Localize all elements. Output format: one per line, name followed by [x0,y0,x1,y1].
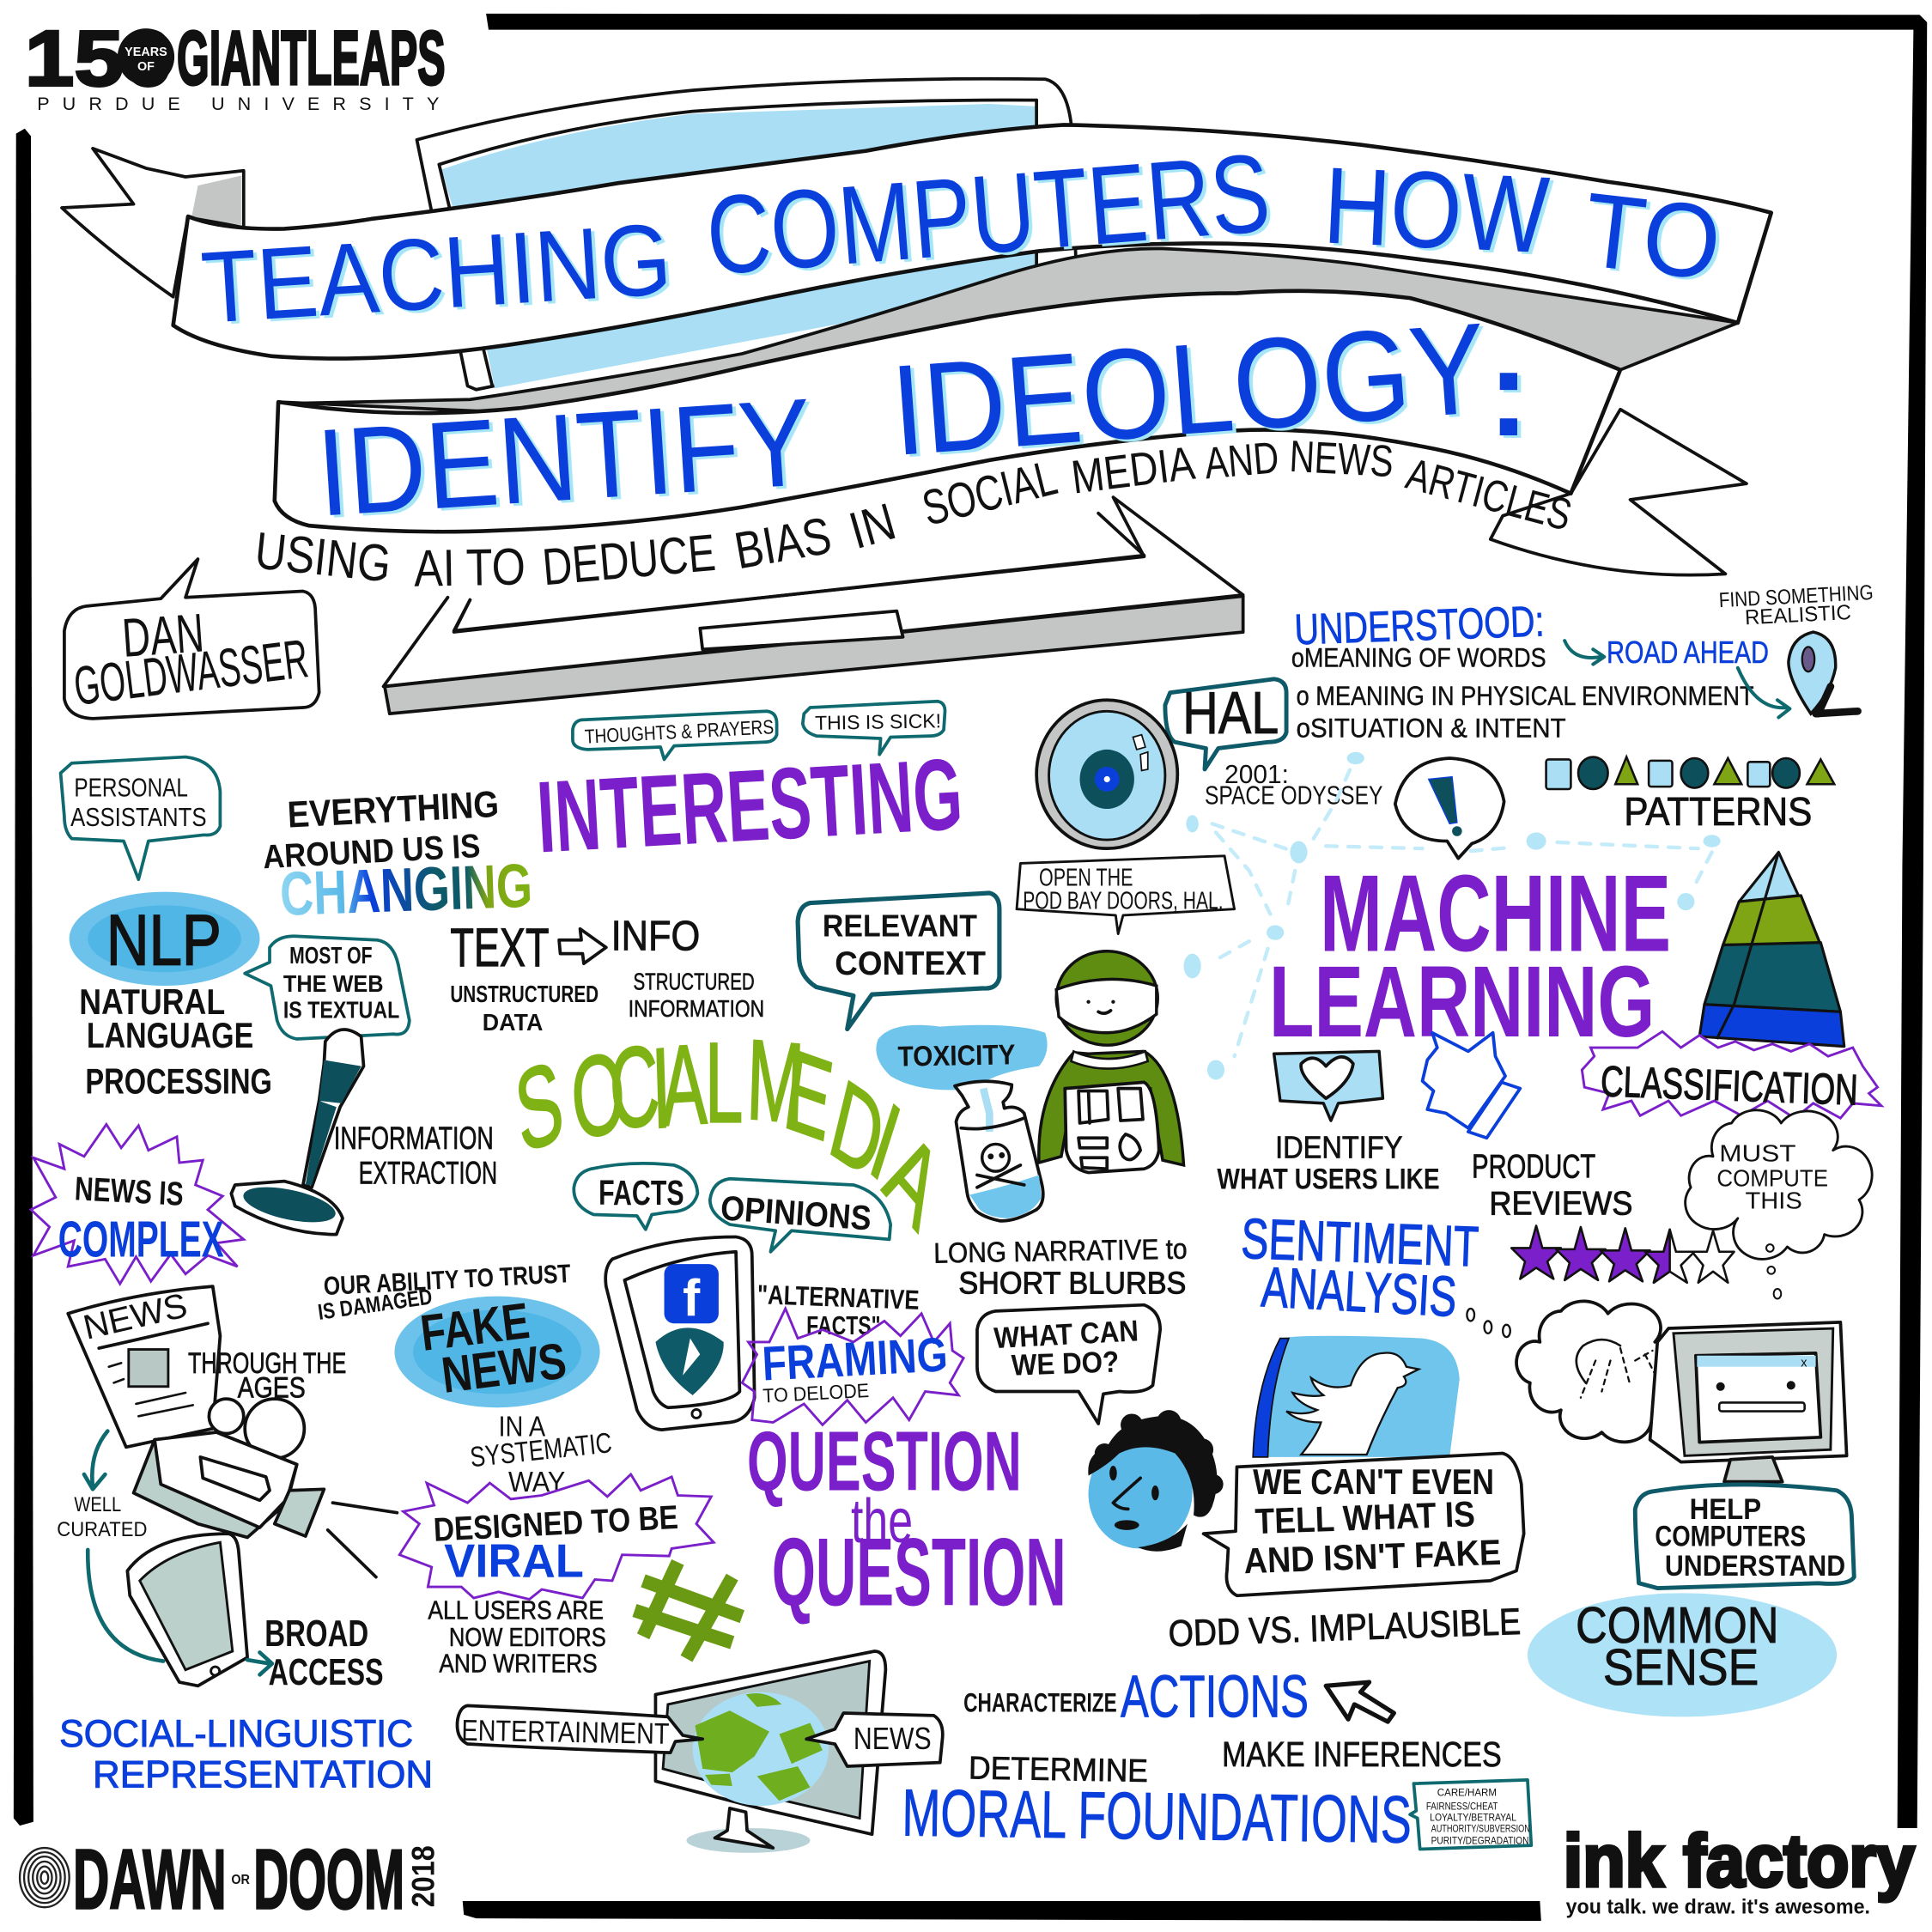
toxicity blob [876,1025,1048,1090]
burst: framing to decode [742,1309,963,1425]
speech bubble: what can we do: WHAT CAN [993,1315,1139,1355]
box: moral foundations list: LOYALTY/BETRAYAL [1430,1813,1517,1823]
text: in a systematic way: WAY [508,1467,565,1498]
common sense blob [1528,1593,1837,1716]
subtitle arc: NEWS [1288,431,1394,486]
icon: star rating [1511,1225,1735,1283]
burst: framing to decode: FRAMING [761,1327,949,1391]
text: unstructured data / structured information: STRUCTURED [634,968,755,994]
icon: newspaper: NEWS [80,1285,191,1347]
text: identify what users like: IDENTIFY [1275,1129,1402,1164]
text block: understood: o MEANING IN PHYSICAL ENVIRONMENT [1297,680,1754,711]
text: 2001 space odyssey: 2001: [1224,761,1289,789]
heading: sentiment analysis: SENTIMENT [1240,1207,1479,1279]
thought cloud: must compute this: COMPUTE [1716,1164,1828,1191]
text: determine / make inferences [969,1735,1502,1789]
speech bubble: help computers understand [1635,1485,1854,1589]
subtitle arc: ARTICLES [1401,448,1577,540]
logo: 150 years of giant leaps: PURDUE UNIVERSITY [37,93,439,114]
icon: hashtag [635,1562,742,1659]
icon: confused computer: x [1801,1357,1807,1370]
title line 2: identify ideology: IDEOLOGY [887,295,1491,483]
heading: machine learning: MACHINE [1320,853,1671,975]
subtitle arc: AI TO [414,538,526,598]
heading: question the question: QUESTION [747,1414,1022,1509]
thought cloud: must compute this [1686,1110,1872,1298]
icon: highlighter pen [231,1030,363,1235]
title ribbon tails [62,149,1747,575]
text: in a systematic way: IN A [499,1411,546,1443]
text: through the ages [188,1347,346,1405]
icon: smartphone with facebook logos: f [683,1269,701,1327]
text: unstructured data / structured information: DATA [483,1009,544,1036]
ink factory logo: you talk. we draw. it's awesome. [1566,1895,1870,1918]
burst: news is complex: NEWS IS [74,1170,185,1213]
text: our ability to trust is damaged: IS DAMAGED [317,1285,434,1325]
text: information extraction [334,1120,497,1191]
text: product reviews [1472,1148,1632,1223]
speech bubble: personal assistants [61,757,220,879]
burst: news is complex [31,1124,244,1284]
text: determine / make inferences: MAKE INFERENCES [1222,1735,1502,1774]
text: in a systematic way [469,1411,613,1498]
text: everything around us is changing [262,784,533,929]
text: broad access: BROAD [264,1613,368,1655]
icon: newspaper [68,1285,220,1447]
dawn or doom logo: DOOM [253,1832,404,1927]
text: identify what users like: WHAT USERS LIKE [1217,1163,1440,1195]
heading: machine learning: LEARNING [1269,945,1655,1059]
icon: confused computer [1650,1322,1847,1482]
title line 1: teaching computers how to: COMPUTERS [702,131,1274,299]
title ribbon 1 [173,125,1771,359]
icon: twitter card [1253,1336,1460,1457]
icon: HAL eye [1036,700,1177,848]
title line 2: identify ideology: : [1488,324,1529,462]
text: broad access: ACCESS [269,1652,384,1693]
constellation network [1184,752,1721,1080]
text: natural language processing [79,981,272,1101]
heading: sentiment analysis: ANALYSIS [1260,1255,1458,1329]
text: alternative facts: FACTS" [806,1312,881,1340]
speech bubble: relevant context: RELEVANT [823,908,977,943]
text: in a systematic way: SYSTEMATIC [469,1427,613,1473]
text: long narrative to short blurbs: LONG NARRATIVE to [933,1234,1188,1270]
text: find something realistic [1718,581,1874,629]
dawn or doom logo: DAWN [73,1832,227,1927]
text: alternative facts [756,1279,920,1340]
laptop illustration [384,79,1243,714]
dawn or doom logo: OR [231,1873,250,1887]
text: natural language processing: PROCESSING [85,1060,272,1101]
heading: question the question: the [851,1487,913,1556]
icons: pattern shapes row [1546,757,1834,789]
text: information extraction: INFORMATION [334,1120,494,1156]
speech bubble: most of the web is textual: IS TEXTUAL [283,996,399,1023]
speech bubble: opinions [710,1179,890,1252]
speech bubble: we can't even tell: TELL WHAT IS [1255,1493,1476,1541]
speech bubble: help computers understand: HELP [1690,1493,1761,1526]
icon: smartphone with facebook logos [605,1236,755,1430]
subtitle arc: DEDUCE [540,523,718,596]
fake news blob [395,1292,600,1407]
text: all users are now editors and writers: AND WRITERS [439,1650,598,1679]
text: product reviews: PRODUCT [1472,1148,1595,1185]
text: everything around us is changing: EVERYTHING [287,784,500,836]
burst: designed to be viral: DESIGNED TO BE [433,1499,679,1549]
box: moral foundations list [1410,1780,1531,1849]
text: broad access [264,1613,384,1693]
icon: television with globe [655,1651,885,1853]
text: well curated: CURATED [57,1518,147,1541]
icon: thought cloud with lightbulb [1516,1301,1693,1442]
text: all users are now editors and writers: ALL USERS ARE [428,1597,604,1625]
logo: 150 years of giant leaps: OF [137,60,155,74]
fake news blob: FAKE [417,1292,532,1362]
speech bubble: help computers understand: UNDERSTAND [1665,1550,1845,1583]
text to info arrow [450,913,700,978]
icon: poison bottle [955,1081,1043,1221]
toxicity blob: TOXICITY [897,1039,1016,1073]
ink factory logo: ink factory [1564,1820,1915,1903]
speech bubble: personal assistants: ASSISTANTS [70,804,207,832]
text: alternative facts: "ALTERNATIVE [756,1279,920,1315]
text: patterns: PATTERNS [1624,789,1812,834]
box: moral foundations list: CARE/HARM [1437,1789,1497,1799]
icon: astronaut [1039,951,1184,1173]
heading: social-linguistic representation: REPRESENTATION [93,1753,433,1795]
text block: understood: UNDERSTOOD: [1294,596,1545,653]
subtitle arc: MEDIA [1068,436,1198,504]
text: characterize actions: ACTIONS [1121,1662,1309,1729]
road ahead with arrows: ROAD AHEAD [1607,635,1769,670]
speech bubble: thoughts and prayers [573,711,777,759]
speech bubble: help computers understand: COMPUTERS [1655,1521,1806,1553]
title line 1: teaching computers how to [198,131,1727,345]
subtitle arc: SOCIAL [917,450,1062,537]
text: long narrative to short blurbs [933,1234,1188,1301]
text: well curated [57,1493,147,1541]
title line 1: teaching computers how to: TEACHING [198,203,675,345]
speech bubble: what can we do [977,1305,1160,1424]
heading: sentiment analysis [1240,1207,1510,1337]
text block: understood: oMEANING OF WORDS [1291,641,1546,672]
thought cloud: must compute this: THIS [1745,1187,1802,1213]
speech bubble: facts: FACTS [598,1173,684,1212]
text block: understood: oSITUATION & INTENT [1297,713,1566,744]
speech bubble: most of the web is textual: THE WEB [283,970,384,997]
text: long narrative to short blurbs: SHORT BLURBS [958,1266,1186,1301]
speech bubble: relevant context: CONTEXT [835,945,986,982]
icon: map pin [1789,632,1858,714]
speech bubble: personal assistants: PERSONAL [74,775,188,803]
speaker bubble: Dan Goldwasser: GOLDWASSER [70,629,312,717]
speech bubble: most of the web is textual: MOST OF [289,942,373,969]
NLP blob: NLP [106,900,222,981]
icon: worried person [1081,1410,1224,1555]
text: unstructured data / structured information: INFORMATION [629,995,764,1022]
heading: question the question: QUESTION [772,1518,1066,1626]
text: all users are now editors and writers [428,1597,606,1679]
text: through the ages: THROUGH THE [188,1347,346,1380]
logo: 150 years of giant leaps [25,14,446,114]
text: 2001 space odyssey [1205,761,1382,810]
title line 2: identify ideology: IDENTIFY [313,373,816,543]
text to info arrow: TEXT [450,918,550,978]
text: characterize actions [963,1662,1309,1729]
text to info arrow: INFO [611,913,700,959]
icon: film camera [134,1399,397,1577]
text: natural language processing: NATURAL [79,981,225,1022]
box: moral foundations list: PURITY/DEGRADATION [1431,1837,1528,1847]
text: unstructured data / structured information [450,968,764,1036]
icon: pyramid [1699,852,1844,1047]
text: 2001 space odyssey: SPACE ODYSSEY [1205,781,1382,810]
text: odd vs implausible: ODD VS. IMPLAUSIBLE [1168,1601,1522,1655]
text: characterize actions: CHARACTERIZE [963,1687,1117,1718]
logo: 150 years of giant leaps: GIANTLEAPS [177,15,446,100]
subtitle arc: USING [252,520,394,593]
speech bubble: HAL [1165,679,1286,769]
subtitle arc [252,431,1577,598]
text: everything around us is changing: AROUND US IS [262,828,481,876]
icon: tablet phone [127,1534,247,1686]
text: all users are now editors and writers: NOW EDITORS [449,1624,606,1652]
heading: moral foundations: MORAL FOUNDATIONS [902,1777,1412,1857]
box: moral foundations list: FAIRNESS/CHEAT [1426,1801,1498,1812]
speech bubble: relevant context [798,893,999,1029]
dawn or doom logo [20,1832,441,1927]
speech bubble: news [806,1713,943,1766]
title ribbon 2 [275,291,1620,532]
text: find something realistic: REALISTIC [1744,601,1852,629]
speech bubble: open the pod bay doors: OPEN THE [1039,864,1133,891]
speech bubble: we can't even tell: AND ISN'T FAKE [1243,1532,1502,1581]
icon: thumbs up [1423,1033,1520,1138]
heading: social-linguistic representation: SOCIAL-LINGUISTIC [59,1713,413,1755]
icon: heart chat bubble [1274,1051,1382,1121]
heading: social-linguistic representation [59,1713,433,1795]
speech bubble: thoughts and prayers: THOUGHTS & PRAYERS [584,715,775,748]
speech bubble: most of the web is textual [245,936,410,1039]
subtitle arc: BIAS [730,506,835,580]
logo: 150 years of giant leaps: 150 [25,14,173,102]
heading: machine learning [1269,853,1671,1059]
common sense blob: SENSE [1603,1639,1759,1696]
NLP blob [70,892,259,986]
text: information extraction: EXTRACTION [359,1155,497,1191]
burst: designed to be viral [399,1474,714,1600]
burst: designed to be viral: VIRAL [444,1534,584,1588]
arrow: news to well curated [84,1431,107,1489]
speech bubble: this is sick: THIS IS SICK! [815,709,941,734]
icon: cursor arrow [1326,1682,1394,1722]
text: identify what users like [1217,1129,1440,1195]
text: everything around us is changing: CHANGING [279,852,533,929]
speech bubble: open the pod bay doors [1017,856,1235,934]
grey ribbon fold [278,248,1738,412]
heading: question the question [747,1414,1066,1626]
speaker bubble: Dan Goldwasser: DAN [120,603,206,669]
text: natural language processing: LANGUAGE [87,1015,253,1055]
road ahead with arrows [1564,635,1789,717]
speech bubble: open the pod bay doors: POD BAY DOORS, HAL. [1023,888,1224,915]
box: moral foundations list: AUTHORITY/SUBVERSION [1431,1824,1530,1834]
text: find something realistic: FIND SOMETHING [1718,581,1874,612]
arrow: curated to phone [88,1550,163,1662]
speaker bubble: Dan Goldwasser [64,559,319,719]
subtitle arc: IN [843,491,902,560]
speech bubble: news: NEWS [854,1721,932,1756]
heading: social media arc: SOCIAL MEDIA [509,1016,953,1254]
text: well curated: WELL [74,1493,121,1516]
arrow: phone to broad access [247,1652,272,1674]
speech bubble: this is sick [803,702,945,755]
text: our ability to trust is damaged: OUR ABILITY TO TRUST [323,1260,572,1301]
speech bubble: entertainment: ENTERTAINMENT [461,1715,670,1751]
speech bubble: exclamation [1395,758,1504,859]
logo: 150 years of giant leaps: YEARS [125,46,167,59]
burst: framing to decode: TO DELODE [762,1379,870,1406]
text: product reviews: REVIEWS [1489,1186,1632,1223]
speech bubble: facts [574,1163,697,1230]
dawn or doom logo: 2018 [405,1845,441,1907]
text: determine / make inferences: DETERMINE [969,1749,1148,1789]
heading: interesting: INTERESTING [534,738,965,874]
title line 1: teaching computers how to: TO [1578,170,1727,302]
text block: understood [1291,596,1754,744]
burst: classification [1582,1031,1881,1118]
speech bubble: opinions: OPINIONS [720,1188,872,1238]
speech bubble: we can't even tell: WE CAN'T EVEN [1253,1461,1494,1502]
common sense blob: COMMON [1576,1597,1778,1654]
text: unstructured data / structured information: UNSTRUCTURED [450,981,598,1007]
subtitle arc: AND [1202,432,1281,488]
speech bubble: what can we do: WE DO? [1011,1346,1120,1382]
burst: news is complex: COMPLEX [58,1212,224,1268]
text: our ability to trust is damaged [317,1260,572,1325]
fake news blob: NEWS [439,1333,569,1404]
text: through the ages: AGES [238,1372,306,1405]
speech bubble: we can't even tell [1204,1454,1524,1595]
title line 2: identify ideology [313,295,1529,543]
speech bubble: HAL: HAL [1182,679,1279,746]
thought cloud: must compute this: MUST [1719,1140,1796,1167]
title line 1: teaching computers how to: HOW [1321,143,1552,276]
